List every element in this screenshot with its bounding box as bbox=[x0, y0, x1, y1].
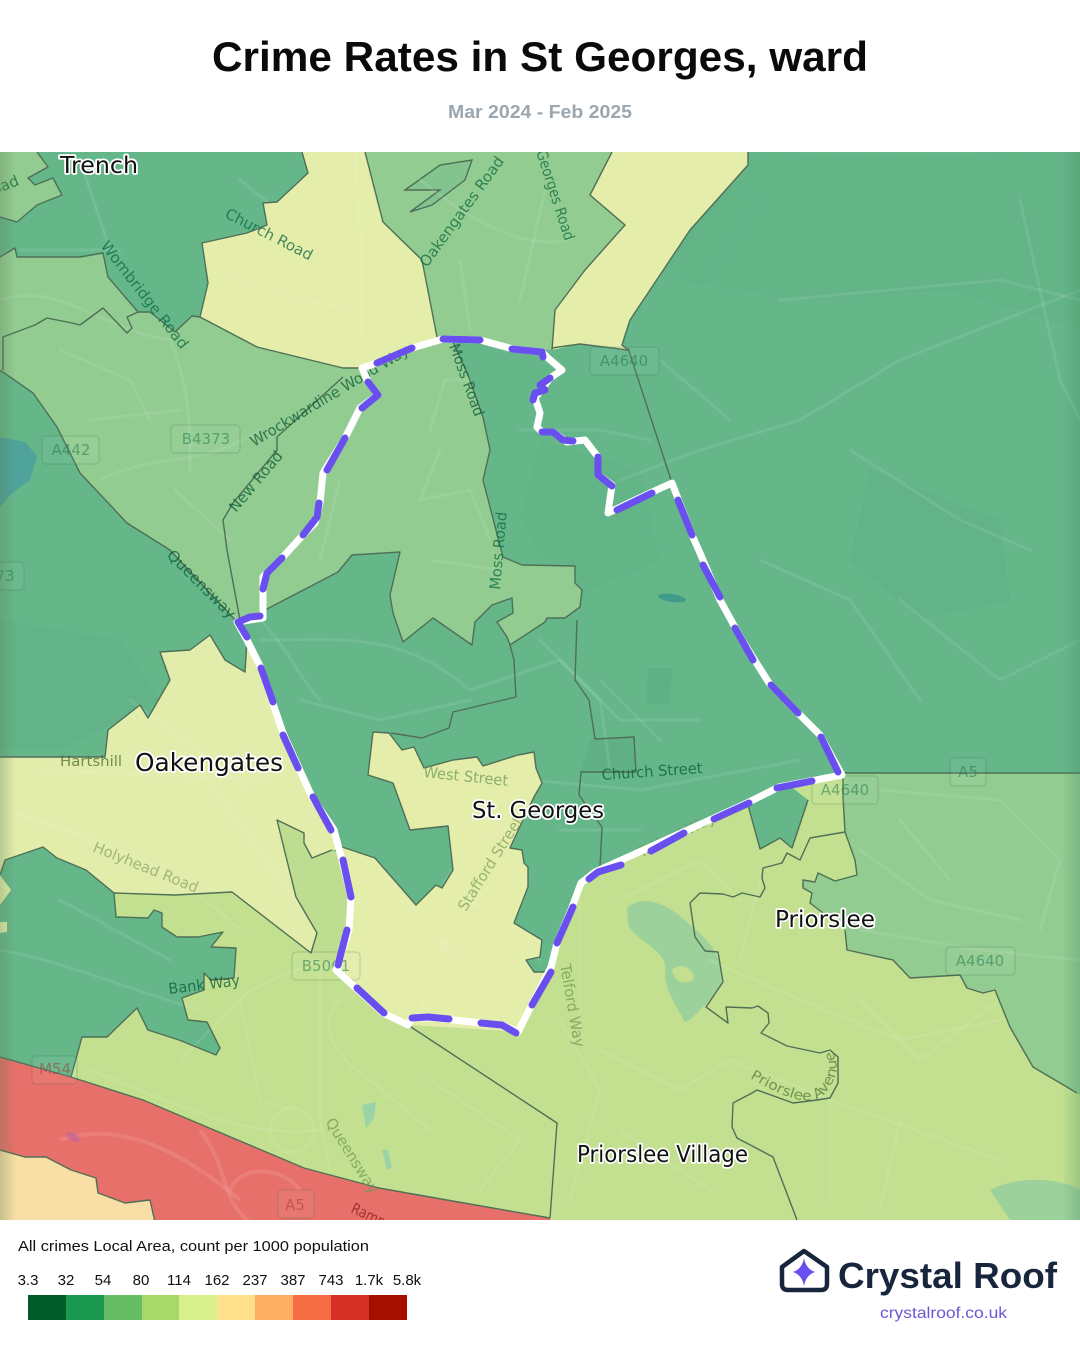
road labels: Priorslee Avenue bbox=[751, 1052, 837, 1100]
legend scale values: 162 bbox=[204, 1272, 230, 1289]
legend scale values bbox=[18, 1272, 422, 1289]
wordmark: Crystal Roof bbox=[838, 1255, 1058, 1296]
logo: Crystal Roof bbox=[782, 1251, 1058, 1322]
road labels: Church Street bbox=[601, 759, 703, 784]
ward boundary: St Georges bbox=[237, 339, 842, 1033]
region: ward south yellow bbox=[336, 732, 551, 1032]
region: south-east lake bbox=[990, 1180, 1080, 1220]
badge: road numbers: B5061 bbox=[302, 957, 350, 975]
legend scale values: 1.7k bbox=[355, 1272, 384, 1289]
region: peach south-west corner bbox=[0, 1150, 155, 1222]
badge: road numbers: B4373 bbox=[182, 430, 230, 448]
road labels: Wrockwardine Wood Way bbox=[247, 341, 412, 450]
legend scale values: 54 bbox=[95, 1272, 111, 1289]
water bodies in south bbox=[362, 1102, 376, 1128]
region: lime sliver west of ward bbox=[278, 821, 336, 869]
website url: crystalroof.co.uk bbox=[880, 1305, 1008, 1322]
legend scale values: 32 bbox=[58, 1272, 74, 1289]
road labels: Queensway bbox=[322, 1115, 383, 1197]
road labels: Bank Way bbox=[167, 971, 241, 998]
boundary lines bbox=[0, 152, 1080, 1222]
legend scale values: 237 bbox=[242, 1272, 268, 1289]
road labels: Queensway bbox=[163, 546, 240, 623]
place labels bbox=[59, 153, 875, 1168]
road labels: Georges Road bbox=[532, 148, 578, 243]
title: Crime Rates in St Georges, ward bbox=[212, 33, 868, 80]
region: dark south-west blob bbox=[0, 880, 236, 1076]
legend scale values: 743 bbox=[318, 1272, 344, 1289]
legend colour swatches bbox=[28, 1295, 407, 1320]
road labels: Church Road bbox=[222, 205, 316, 264]
region: lake near Priorslee bbox=[627, 901, 722, 1022]
east darker patches bbox=[0, 152, 1080, 772]
legend title: All crimes Local Area, count per 1000 population bbox=[18, 1238, 369, 1255]
road labels: West Street bbox=[423, 763, 509, 790]
legend scale values: 114 bbox=[167, 1272, 191, 1289]
legend scale values: 5.8k bbox=[393, 1272, 422, 1289]
map edge fade bbox=[0, 152, 14, 1220]
region: north-west corner mid-green bbox=[0, 152, 62, 222]
subtitle: date range: Mar 2024 - Feb 2025 bbox=[448, 102, 632, 122]
badge: road numbers: M54 bbox=[39, 1060, 71, 1078]
legend bbox=[18, 1238, 422, 1320]
road network texture bbox=[0, 152, 1080, 1210]
region: ward centre mid-green bbox=[263, 339, 582, 645]
region: west mid-green bbox=[0, 248, 378, 622]
road labels: Wombridge Road bbox=[97, 237, 192, 352]
place labels: St. Georges bbox=[472, 798, 604, 824]
place labels: Trench bbox=[59, 153, 138, 179]
icon: house with star bbox=[782, 1251, 827, 1290]
badge: road numbers: A4640 bbox=[600, 352, 648, 370]
road labels: Oakengates Road bbox=[416, 153, 508, 270]
road labels: Holyhead Road bbox=[91, 838, 201, 897]
road labels: Telford Way bbox=[556, 962, 588, 1049]
badge: road numbers: A4640 bbox=[956, 952, 1004, 970]
badge: road numbers: A442 bbox=[52, 441, 90, 459]
legend scale values: 80 bbox=[133, 1272, 149, 1289]
water: west lake bbox=[0, 437, 37, 507]
region: Oakengates yellow bbox=[0, 635, 342, 953]
road labels bbox=[0, 152, 842, 1270]
region: lime south bbox=[0, 773, 1080, 1220]
region: north-east yellow bbox=[552, 152, 748, 350]
region: red high-crime band bbox=[0, 1057, 552, 1222]
road labels: Hartshill bbox=[60, 754, 122, 770]
red band interchange detail bbox=[60, 1130, 300, 1222]
region: north-centre mid-green bbox=[365, 152, 625, 350]
place labels: Oakengates bbox=[135, 748, 283, 777]
road labels: Telford Way bbox=[634, 809, 718, 862]
road labels: New Road bbox=[225, 447, 287, 516]
road labels: Moss Road bbox=[445, 341, 488, 419]
badge: road numbers bbox=[0, 347, 1015, 1218]
road labels: Moss Road bbox=[486, 511, 511, 590]
place labels: Priorslee Village bbox=[577, 1142, 748, 1168]
place labels: Priorslee bbox=[775, 907, 875, 933]
legend scale values: 387 bbox=[280, 1272, 306, 1289]
legend scale values: 3.3 bbox=[18, 1272, 38, 1289]
road labels: Stafford Street bbox=[454, 813, 527, 914]
region: dark wedge by A4640 bbox=[748, 786, 808, 849]
badge: road numbers: A5 bbox=[958, 763, 978, 781]
road labels: Ramp bbox=[348, 1199, 389, 1231]
badge: road numbers: A4640 bbox=[821, 781, 869, 799]
badge: road numbers: A5 bbox=[285, 1196, 305, 1214]
region: east mid-green bbox=[803, 773, 1080, 1095]
region: north yellow bbox=[200, 152, 437, 368]
